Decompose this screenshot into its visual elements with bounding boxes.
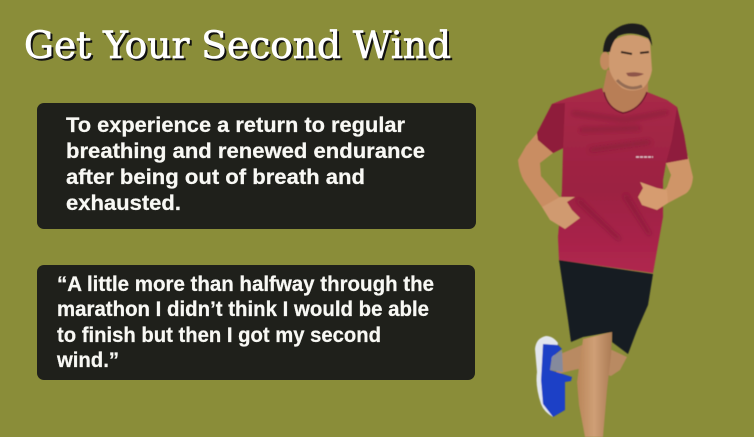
right forearm — [660, 156, 693, 203]
head — [600, 23, 652, 90]
panel: example quote — [37, 265, 475, 380]
panel: definition — [37, 103, 476, 229]
neck — [603, 70, 648, 112]
running shoe — [535, 336, 572, 417]
panel: definition: exhausted. — [66, 192, 181, 215]
front leg — [577, 332, 612, 437]
panel: example quote: to finish but then I got my second — [57, 324, 381, 347]
panel: definition: To experience a return to regular — [66, 114, 405, 137]
panel: definition: breathing and renewed endurance — [66, 140, 425, 163]
illustration: runner — [518, 23, 693, 437]
panel: example quote: “A little more than halfway through the — [57, 273, 434, 296]
panel: example quote: marathon I didn’t think I would be able — [57, 298, 429, 321]
panel: definition: after being out of breath and — [66, 166, 365, 189]
shorts — [559, 260, 653, 354]
panel: example quote: wind.” — [56, 349, 119, 372]
left hand — [542, 197, 580, 229]
back leg — [553, 345, 627, 376]
title: Get Your Second Wind — [24, 24, 451, 67]
right hand — [638, 182, 668, 210]
title: Get Your Second Wind — [26, 26, 453, 69]
t-shirt — [537, 88, 688, 273]
left upper arm — [518, 133, 562, 215]
